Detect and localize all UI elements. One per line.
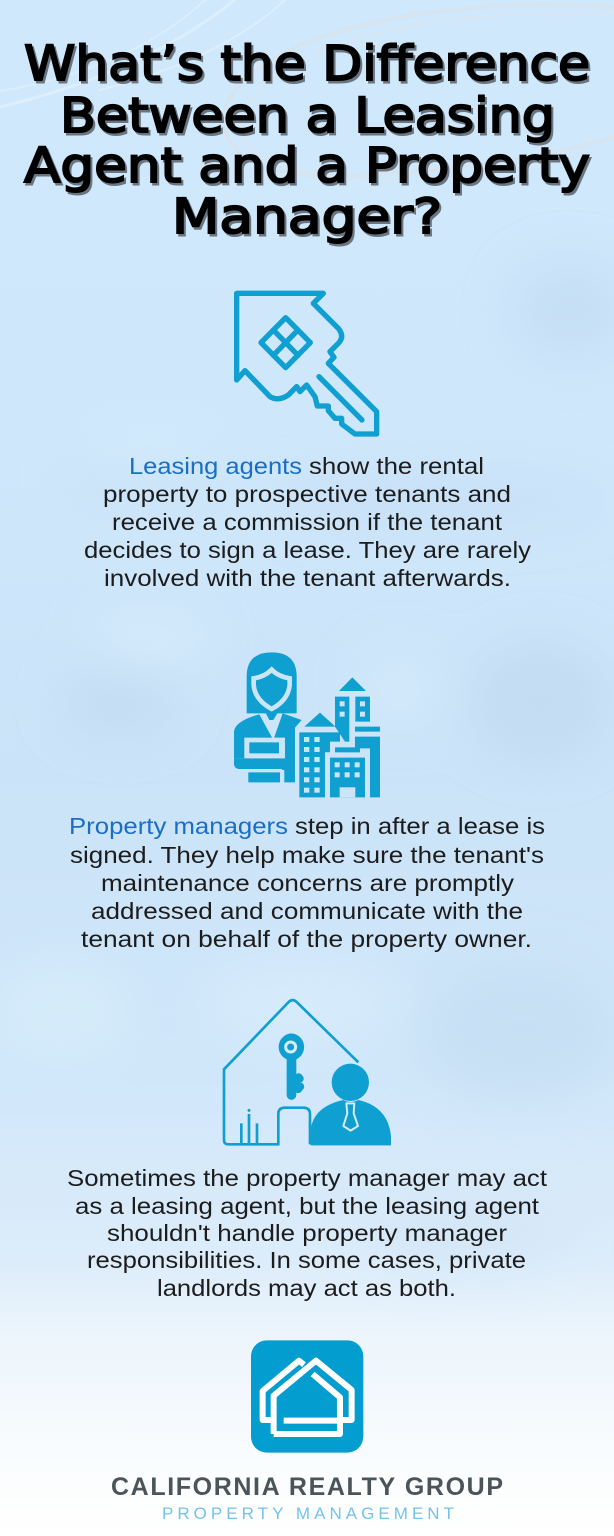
text: both roles: shouldn't handle property manager	[107, 1220, 507, 1246]
text: property managers	[69, 813, 545, 952]
text: leasing agents	[84, 453, 532, 591]
icon: property manager and buildings	[234, 652, 380, 797]
text: both roles: Sometimes the property manager may act	[67, 1165, 548, 1191]
title: Manager?	[174, 192, 444, 248]
text: property managers: addressed and communicate with the	[91, 898, 523, 924]
title	[24, 36, 592, 248]
text: property managers: tenant on behalf of the property owner.	[81, 926, 532, 952]
text: both roles: responsibilities. In some cases, private	[87, 1247, 526, 1273]
text: leasing agents: Leasing agents	[129, 453, 302, 479]
title: What’s the Difference	[24, 36, 590, 92]
title: Between a Leasing	[62, 90, 557, 146]
title: Between a Leasing	[60, 88, 555, 144]
text: leasing agents: involved with the tenant afterwards.	[104, 565, 511, 591]
text: property managers: step in after a lease is	[295, 813, 545, 839]
icon: house key	[237, 293, 377, 434]
title: Agent and a Property	[26, 140, 592, 196]
text: leasing agents: show the rental	[309, 453, 484, 479]
title: Manager?	[172, 189, 442, 245]
text: leasing agents: property to prospective tenants and	[103, 481, 511, 507]
text: both roles: as a leasing agent, but the leasing agent	[75, 1193, 540, 1219]
title: What’s the Difference	[26, 38, 592, 94]
text: leasing agents: decides to sign a lease. They are rarely	[84, 537, 532, 563]
logo: tagline: PROPERTY MANAGEMENT	[162, 1504, 454, 1523]
icon: house, key and agent	[224, 1000, 391, 1145]
title: Agent and a Property	[24, 138, 590, 194]
text: property managers: signed. They help make sure the tenant's	[70, 842, 544, 868]
text: both roles	[67, 1165, 548, 1301]
logo: company icon	[251, 1340, 363, 1453]
logo: company name: CALIFORNIA REALTY GROUP	[111, 1473, 503, 1501]
text: both roles: landlords may act as both.	[157, 1275, 456, 1301]
text: property managers: Property managers	[69, 813, 288, 839]
text: property managers: maintenance concerns are promptly	[101, 870, 515, 896]
text: leasing agents: receive a commission if the tenant	[112, 509, 503, 535]
